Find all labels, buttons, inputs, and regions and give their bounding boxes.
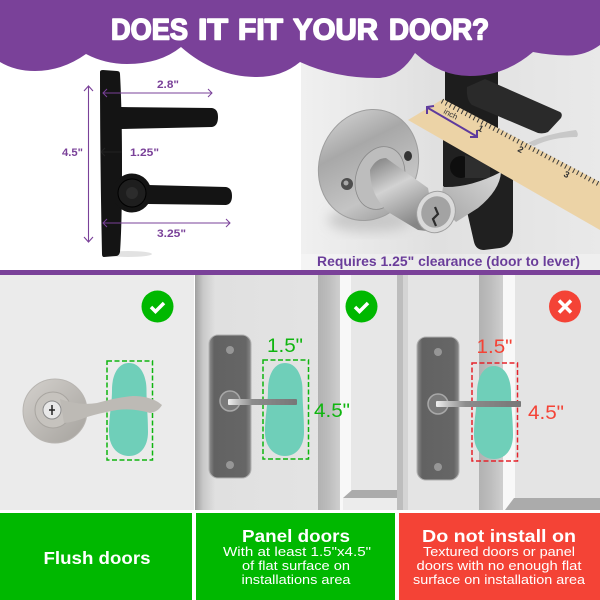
icon: check bbox=[346, 290, 378, 322]
label: height: 4.5" bbox=[314, 401, 350, 422]
caption text: Requires 1.25" clearance (door to lever) bbox=[317, 254, 580, 269]
fit zone: dashed outline bbox=[263, 360, 308, 459]
arrow: 1.25 inch clearance bbox=[101, 148, 122, 156]
title: DOOR? bbox=[389, 14, 489, 46]
panel: handle dimensions bbox=[0, 0, 300, 270]
icon: wooden ruler: inch bbox=[442, 107, 459, 122]
panel: flush door bbox=[0, 275, 194, 510]
label: 1.25 inch: 1.25" bbox=[130, 147, 159, 159]
fit zone: teal sticker bbox=[474, 366, 513, 459]
panel: panel door not ok bbox=[397, 275, 600, 510]
heading: Flush doors bbox=[44, 548, 151, 568]
label: 3.25 inch: 3.25" bbox=[157, 228, 186, 240]
fit zone: dashed outline bbox=[107, 361, 152, 460]
icon: wooden ruler: 2 bbox=[516, 144, 525, 155]
panel: panel door ok bbox=[195, 275, 397, 510]
arrow: 2.8 inch depth bbox=[103, 89, 212, 97]
icon: black handle behind ruler bbox=[443, 60, 562, 250]
description: With at least 1.5"x4.5" bbox=[223, 544, 371, 559]
icon: wooden ruler bbox=[408, 99, 600, 230]
icon: backplate handle bbox=[209, 335, 297, 478]
icon: backplate handle bbox=[417, 337, 521, 480]
heading: Do not install on bbox=[422, 526, 576, 546]
label: width: 1.5" bbox=[476, 337, 512, 358]
icon: cross bbox=[549, 290, 581, 322]
description bbox=[413, 544, 586, 587]
box: do not install bbox=[399, 513, 600, 600]
arrow: height bbox=[84, 86, 93, 242]
fit zone: dashed outline bbox=[472, 363, 518, 461]
icon: door lever bbox=[23, 379, 162, 443]
arrow: 3.25 inch depth bbox=[103, 219, 230, 227]
panel: clearance photo bbox=[301, 0, 600, 270]
icon: check bbox=[142, 290, 174, 322]
header banner bbox=[0, 0, 600, 78]
fit zone: teal sticker bbox=[265, 363, 304, 456]
description: installations area bbox=[242, 572, 351, 587]
icon: wooden ruler: 3 bbox=[562, 169, 571, 180]
fit zone: teal sticker bbox=[109, 363, 148, 456]
heading: Panel doors bbox=[242, 526, 350, 546]
description: of flat surface on bbox=[242, 558, 350, 573]
title bbox=[111, 14, 489, 46]
box: panel doors bbox=[196, 513, 395, 600]
label: width: 1.5" bbox=[267, 336, 303, 357]
arrow: clearance on ruler bbox=[427, 106, 477, 137]
icon: wooden ruler: 1 bbox=[476, 123, 485, 134]
label: 2.8 inch: 2.8" bbox=[157, 79, 179, 91]
icon: silver lever tail bbox=[528, 130, 578, 146]
divider band bbox=[0, 270, 600, 275]
box: flush doors bbox=[0, 513, 192, 600]
description: Textured doors or panel bbox=[423, 544, 575, 559]
title: YOUR bbox=[293, 14, 378, 46]
label: 4.5 inch: 4.5" bbox=[62, 147, 83, 159]
description: doors with no enough flat bbox=[416, 558, 582, 573]
title: FIT bbox=[238, 14, 283, 46]
description: surface on installation area bbox=[413, 572, 586, 587]
icon: black handle side view bbox=[100, 70, 232, 257]
description bbox=[223, 544, 371, 587]
label: height: 4.5" bbox=[528, 403, 564, 424]
title: DOES bbox=[111, 14, 188, 46]
icon: silver door lever bbox=[302, 94, 501, 239]
title: IT bbox=[198, 14, 228, 46]
